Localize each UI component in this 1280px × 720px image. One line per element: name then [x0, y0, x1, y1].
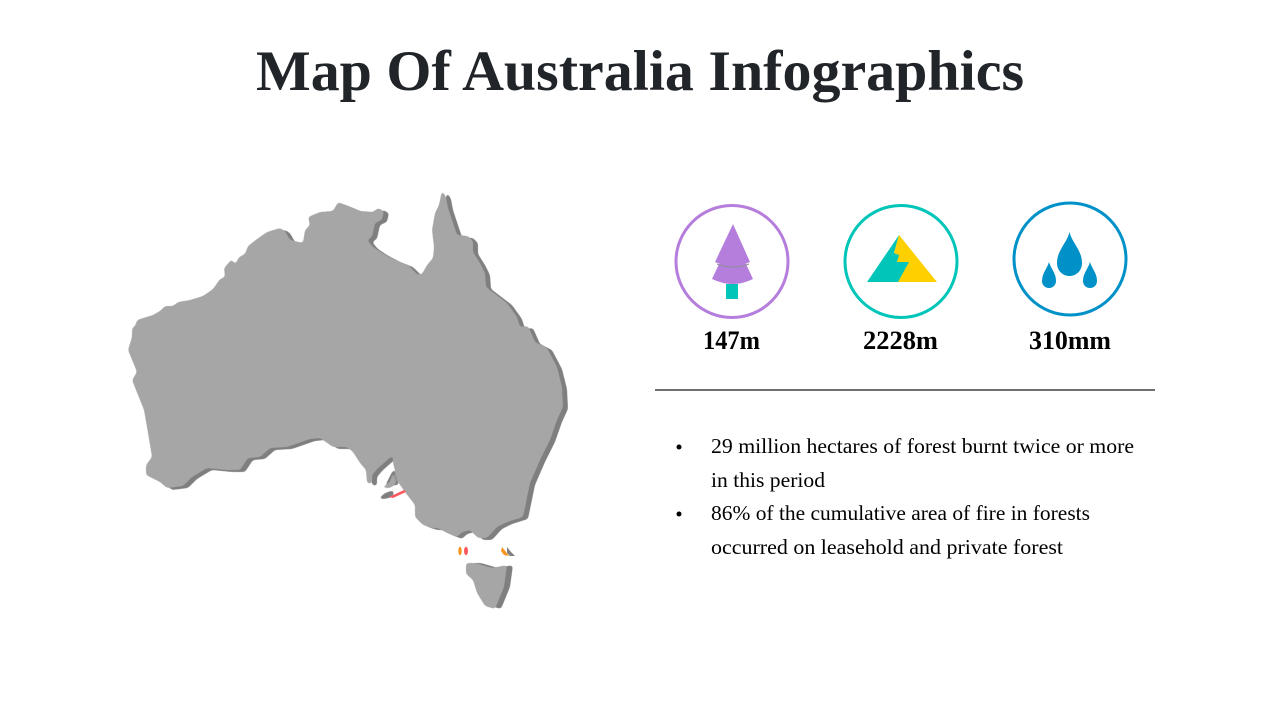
value: 147m: 147m	[703, 326, 760, 355]
bullet 2: 86% of the cumulative area of fire in forests	[711, 501, 1090, 525]
bullet list	[676, 434, 1134, 559]
bullet 1: 29 million hectares of forest burnt twice or more	[711, 434, 1134, 458]
bullet 2: occurred on leasehold and private forest	[711, 535, 1063, 559]
bullet 1: in this period	[711, 468, 826, 492]
value: 310mm: 310mm	[1029, 326, 1111, 355]
icon: mountain	[845, 206, 957, 318]
map of Australia	[128, 190, 568, 609]
fire markers: Bass Strait	[458, 547, 515, 556]
stat: elevation	[845, 206, 957, 355]
bullet 2	[676, 501, 1090, 559]
bullet 1	[676, 434, 1134, 492]
stat: rainfall	[1014, 203, 1126, 355]
stat: tree height	[676, 206, 788, 355]
icon: tree	[676, 206, 788, 318]
value: 2228m: 2228m	[863, 326, 938, 355]
map shadow	[133, 192, 568, 609]
fire marker: Kangaroo Island	[389, 490, 406, 498]
icon: water drops	[1014, 203, 1126, 315]
map land surface	[128, 190, 563, 609]
title: Map Of Australia Infographics	[256, 40, 1024, 103]
